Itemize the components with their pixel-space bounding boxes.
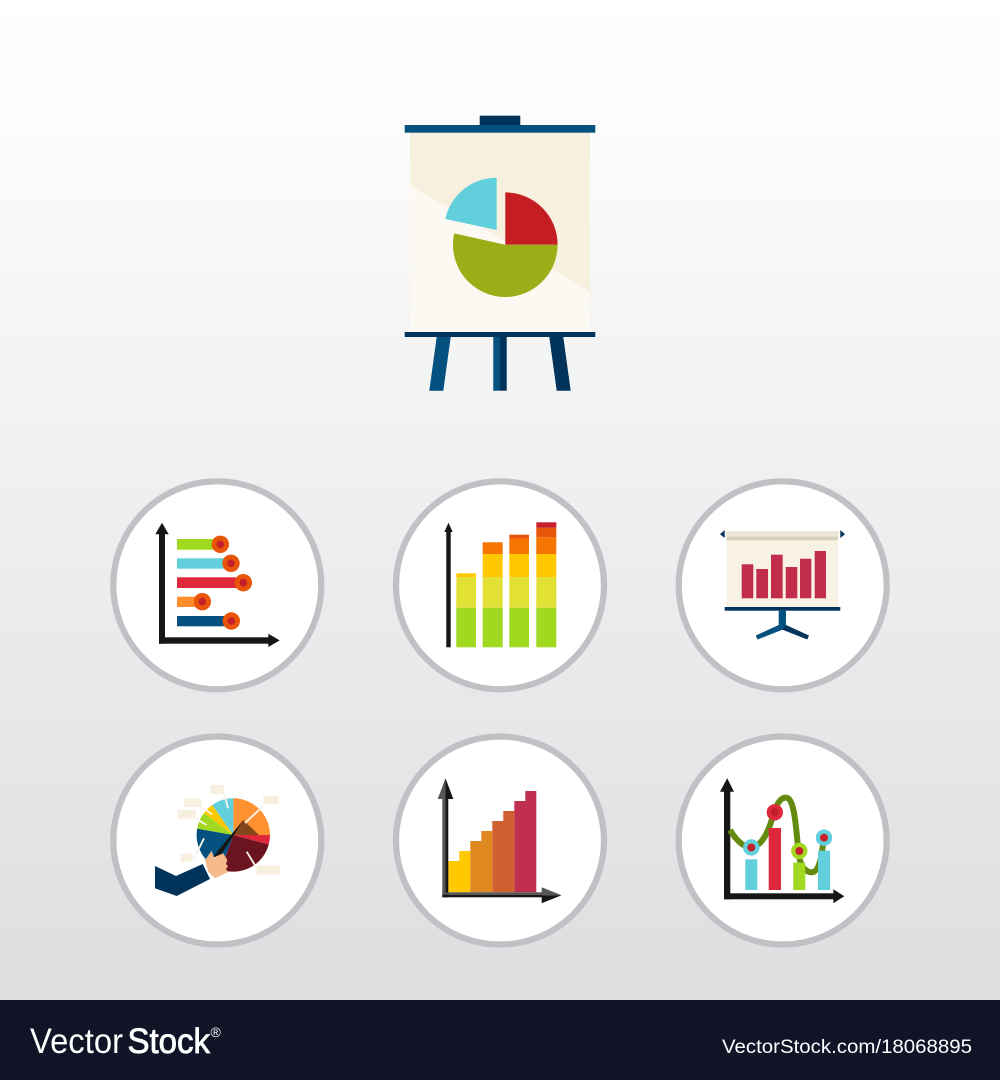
sleeve bbox=[155, 864, 210, 896]
bars bbox=[177, 539, 243, 626]
leader lines bbox=[193, 794, 263, 868]
hand bbox=[205, 851, 228, 878]
screen stand bbox=[725, 607, 840, 640]
panel: horizontal bars icon circle bbox=[113, 481, 321, 689]
stair bars bbox=[448, 791, 536, 892]
trend curve bbox=[730, 798, 824, 872]
easel top knob bbox=[480, 116, 520, 125]
panel: stacked bars icon circle bbox=[396, 481, 604, 689]
panel: bars and curve icon circle bbox=[679, 736, 887, 944]
footer url: VectorStock.com/18068895 bbox=[722, 1036, 972, 1058]
easel legs bbox=[429, 337, 571, 391]
panel: pie chart with hand icon circle bbox=[113, 736, 321, 944]
projection screen bbox=[720, 530, 845, 607]
curve markers bbox=[743, 804, 832, 859]
screen bars bbox=[742, 551, 826, 598]
pointer bbox=[213, 820, 243, 857]
footer bar bbox=[0, 1000, 1000, 1080]
callout labels bbox=[178, 785, 280, 874]
axes bbox=[720, 778, 844, 903]
pie chart bbox=[445, 178, 558, 297]
panel: stair bar chart icon circle bbox=[396, 736, 604, 944]
easel bottom bar bbox=[405, 332, 595, 337]
footer logo bold part: Stock bbox=[128, 1022, 210, 1061]
pie slices bbox=[197, 798, 270, 872]
registered mark: ® bbox=[210, 1024, 222, 1040]
easel top bar bbox=[405, 125, 595, 133]
axes bbox=[155, 523, 280, 647]
stacked bars bbox=[456, 522, 556, 647]
arrow bbox=[444, 523, 453, 647]
icon: presentation easel with pie chart bbox=[405, 116, 595, 391]
panel: projector screen icon circle bbox=[679, 481, 887, 689]
footer logo: Vector bbox=[30, 1022, 123, 1061]
markers bbox=[194, 536, 252, 630]
bars bbox=[745, 828, 830, 890]
easel paper bbox=[410, 133, 590, 332]
axes bbox=[438, 778, 562, 903]
